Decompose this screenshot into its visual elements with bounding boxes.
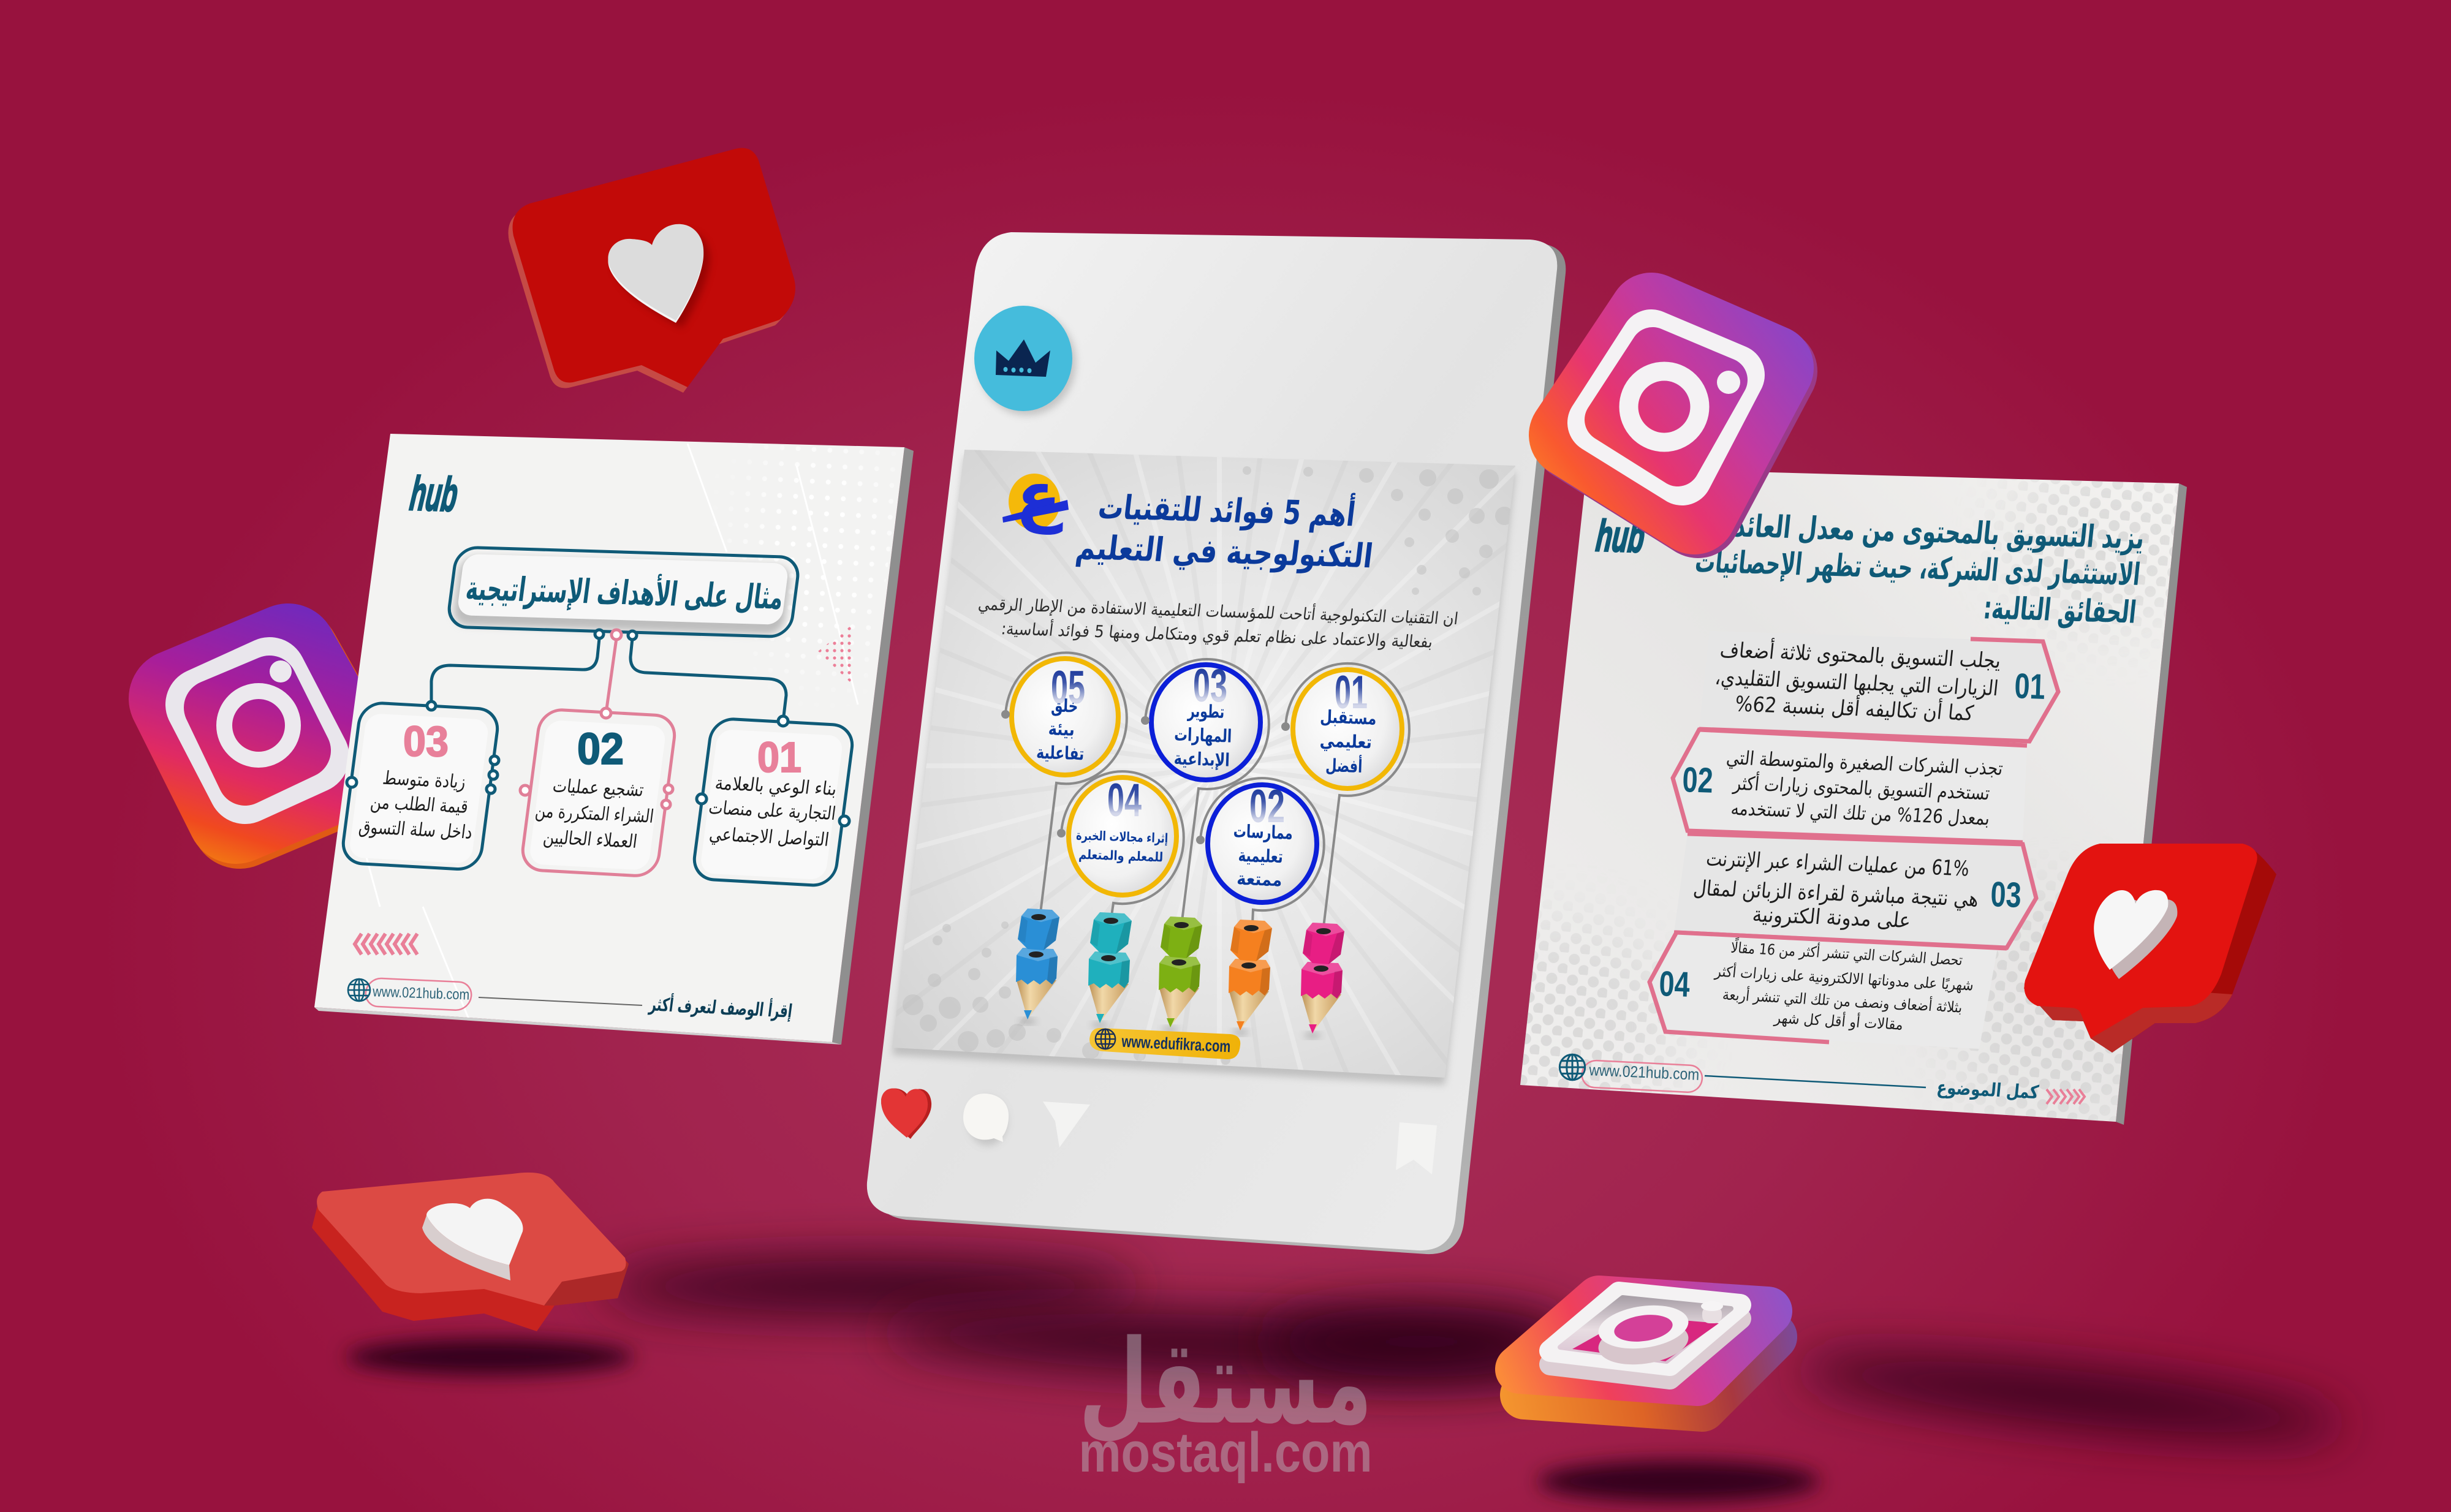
box 01: التواصل الاجتماعي — [708, 823, 830, 851]
icon: heart bubble right — [2024, 844, 2276, 1053]
benefit 03: 03 — [1193, 660, 1227, 712]
pencil: green — [1159, 917, 1202, 1032]
item 04: بثلاثة أضعاف ونصف من تلك التي تنشر أربعة — [1722, 985, 1963, 1016]
benefit 01 — [1281, 663, 1409, 927]
infographic card — [895, 450, 1515, 1078]
icon: heart bubble top — [509, 148, 795, 393]
intro text: ان التقنيات التكنولوجية أتاحت للمؤسسات التعليمية الاستفادة من الإطار الرقمي — [977, 592, 1460, 629]
heading: يزيد التسويق بالمحتوى من معدل العائد على — [1680, 506, 2146, 556]
item 03: هي نتيجة مباشرة لقراءة الزبائن لمقال — [1692, 876, 1980, 912]
watermark: mostaql.com — [1078, 1421, 1373, 1484]
heading — [1074, 485, 1375, 575]
watermark: مستقل — [1078, 1315, 1373, 1450]
box 03: قيمة الطلب من — [369, 792, 469, 818]
item 01 — [1699, 631, 2058, 741]
benefit 05: 05 — [1051, 662, 1085, 714]
item 03: 61% من عمليات الشراء عبر الإنترنت — [1705, 847, 1971, 882]
website pill: www.021hub.com — [1588, 1060, 1700, 1084]
heading box: مثال على الأهداف الإستراتيجية — [464, 568, 786, 618]
benefit 02: ممتعة — [1237, 868, 1282, 890]
panel: left post card — [314, 434, 914, 1045]
benefit 04: للمعلم والمتعلم — [1078, 847, 1164, 864]
icon: comment — [963, 1094, 1009, 1146]
intro text: بفعالية والاعتماد على نظام تعلم قوي ومتكامل ومنها 5 فوائد أساسية: — [1000, 617, 1434, 652]
box 01: بناء الوعي بالعلامة — [714, 773, 838, 800]
panel: right post card — [1471, 429, 2237, 1164]
item 04: تحصل الشركات التي تنشر أكثر من 16 مقالًا — [1730, 937, 1964, 969]
benefit 01: مستقبل — [1320, 706, 1377, 729]
item 01: كما أن تكاليفه أقل بنسبة 62% — [1734, 690, 1976, 726]
benefit 04: إثراء مجالات الخبرة — [1076, 828, 1169, 846]
benefit 03: الإبداعية — [1173, 747, 1230, 771]
item 04: مقالات أو أقل كل شهر — [1773, 1008, 1904, 1034]
item 02 — [1673, 730, 2027, 842]
benefit 01: أفضل — [1325, 754, 1363, 777]
logo: edufikra: ع — [1015, 457, 1066, 535]
box 02 — [520, 708, 677, 877]
item 02: تستخدم التسويق بالمحتوى زيارات أكثر — [1731, 771, 1991, 804]
box 02: 02 — [577, 725, 624, 774]
heading box — [447, 547, 800, 637]
box 03: زيادة متوسط — [381, 768, 467, 793]
heading: الاستثمار لدى الشركة، حيث تظهر الإحصائيات — [1694, 543, 2142, 593]
avatar: crown — [974, 306, 1076, 415]
item 03 — [1674, 834, 2036, 948]
pencil: orange — [1229, 920, 1272, 1035]
website pill — [348, 978, 473, 1011]
icon: instagram left — [178, 652, 356, 820]
benefit 05: بيئة — [1048, 718, 1075, 740]
box 02: العملاء الحاليين — [542, 826, 638, 853]
box 01 — [692, 716, 855, 886]
benefit 02: 02 — [1249, 781, 1285, 833]
item 04: 04 — [1659, 964, 1691, 1005]
website pill — [1559, 1054, 1703, 1093]
benefit 04 — [1057, 771, 1184, 916]
item 02: تجذب الشركات الصغيرة والمتوسطة التي — [1726, 747, 2004, 780]
item 01: الزيارات التي يجلبها التسويق التقليدي، — [1714, 665, 1999, 701]
box 03: داخل سلة التسوق — [357, 817, 474, 844]
benefit 03 — [1141, 659, 1269, 921]
item 04: شهريًا على مدوناتها الالكترونية على زيارات أكثر — [1713, 961, 1975, 994]
item 01: 01 — [2014, 666, 2046, 707]
item 01: يجلب التسويق بالمحتوى ثلاثة أضعاف — [1719, 636, 2002, 673]
pencil: pink — [1301, 923, 1344, 1038]
pencil: blue — [1016, 909, 1059, 1024]
item 03: على مدونة الكترونية — [1751, 902, 1912, 933]
intro text — [977, 592, 1460, 652]
icon: instagram bottom — [1520, 1293, 1773, 1407]
benefit 01: تعليمي — [1319, 730, 1372, 752]
icon: like — [881, 1088, 931, 1139]
benefit 02: تعليمية — [1238, 845, 1283, 867]
box 02: الشراء المتكررة من — [534, 800, 655, 828]
watermark — [1078, 1315, 1373, 1484]
dotted triangle — [818, 624, 854, 686]
icon: share — [1043, 1102, 1090, 1147]
floor shadows — [346, 1260, 2348, 1502]
box 01: التجارية على منصات — [707, 797, 837, 825]
box 03 — [341, 701, 500, 870]
benefit 01: 01 — [1335, 667, 1368, 719]
benefit 05: تفاعلية — [1036, 742, 1085, 764]
icon: bookmark — [1396, 1122, 1437, 1174]
heading: الحقائق التالية: — [1982, 589, 2138, 631]
icon: instagram top right — [1572, 316, 1775, 515]
icon: heart bubble bottom — [312, 1173, 629, 1331]
benefit 02: ممارسات — [1233, 820, 1293, 844]
item 02: 02 — [1682, 760, 1714, 801]
website pill — [1089, 1028, 1240, 1059]
call to action: إقرأ الوصف لتعرف أكثر — [647, 992, 794, 1022]
chevrons — [2047, 1089, 2085, 1104]
connectors — [431, 630, 786, 721]
logo: hub: hub — [407, 466, 461, 521]
benefit 02 — [1196, 778, 1324, 924]
heading — [1680, 506, 2146, 631]
benefit 03: تطوير — [1186, 700, 1225, 722]
item 03: 03 — [1990, 874, 2022, 915]
box 01: 01 — [757, 733, 801, 781]
box 03: 03 — [403, 717, 449, 765]
website pill: www.edufikra.com — [1121, 1032, 1231, 1056]
pencil: teal — [1088, 912, 1132, 1028]
box 02: تشجيع عمليات — [551, 775, 645, 801]
item 04 — [1650, 932, 2007, 1049]
call to action: كمل الموضوع — [1936, 1077, 2040, 1103]
benefit 04: 04 — [1107, 774, 1142, 826]
benefit 05: خلق — [1051, 695, 1078, 717]
item 02: بمعدل 126% من تلك التي لا تستخدمه — [1730, 798, 1991, 830]
benefit 05 — [1001, 652, 1127, 913]
panel: central phone post — [866, 232, 1566, 1255]
chevrons — [355, 934, 417, 954]
heading: التكنولوجية في التعليم — [1074, 528, 1375, 575]
benefit 03: المهارات — [1174, 724, 1232, 747]
heading: أهم 5 فوائد للتقنيات — [1096, 485, 1358, 534]
website pill: www.021hub.com — [372, 983, 470, 1004]
logo: hub: hub — [1594, 512, 1647, 562]
